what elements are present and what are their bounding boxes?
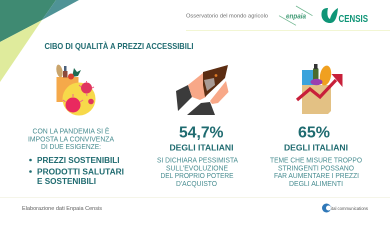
logo: publisher: ital communications xyxy=(331,206,369,212)
icon: hands with empty wallet xyxy=(176,65,228,115)
text block: middle: SI DICHIARA PESSIMISTA xyxy=(157,156,238,164)
header tagline: Osservatorio del mondo agricolo xyxy=(186,14,268,20)
icon: grocery bag with rising arrow xyxy=(297,64,342,114)
icon: grocery bag with virus xyxy=(55,64,96,116)
text block: left intro: DI DUE ESIGENZE: xyxy=(41,142,101,151)
text block: left intro: IMPOSTA LA CONVIVENZA xyxy=(28,134,114,143)
title: CIBO DI QUALITÀ A PREZZI ACCESSIBILI xyxy=(44,41,194,51)
text block: right xyxy=(270,156,362,188)
logo: publisher xyxy=(322,204,369,212)
text block: middle: D'ACQUISTO xyxy=(176,179,217,188)
stat label: degli italiani: DEGLI ITALIANI xyxy=(170,144,234,152)
header rule xyxy=(186,30,390,32)
bullet list: E SOSTENIBILI xyxy=(37,177,96,186)
text block: middle: DEL PROPRIO POTERE xyxy=(160,171,234,180)
text block: middle: SULL'EVOLUZIONE xyxy=(166,163,228,172)
footer rule xyxy=(0,196,390,198)
bullet list: PRODOTTI SALUTARI xyxy=(37,168,124,176)
stat: 65%: 65% xyxy=(298,124,330,142)
logo: Enpaia xyxy=(279,6,312,25)
text block: right: FAR AUMENTARE I PREZZI xyxy=(274,171,359,180)
text block: right: TEME CHE MISURE TROPPO xyxy=(270,156,362,164)
logo: Censis: CENSIS xyxy=(338,13,368,25)
footer source: Elaborazione dati Enpaia Censis xyxy=(22,206,102,212)
text block: middle xyxy=(157,156,238,188)
stat label: degli italiani: DEGLI ITALIANI xyxy=(284,144,348,152)
bullet list: PREZZI SOSTENIBILI xyxy=(37,156,120,165)
logo: Censis xyxy=(321,8,368,25)
text block: right: DEGLI ALIMENTI xyxy=(289,179,343,188)
text block: left intro xyxy=(28,126,114,151)
text block: right: STRINGENTI POSSANO xyxy=(278,163,354,172)
logo: Enpaia: enpaia xyxy=(286,12,306,20)
text block: left intro: CON LA PANDEMIA SI È xyxy=(32,126,110,135)
bullet list xyxy=(29,156,124,186)
stat: 54,7%: 54,7% xyxy=(179,124,224,142)
corner decoration xyxy=(0,0,79,82)
